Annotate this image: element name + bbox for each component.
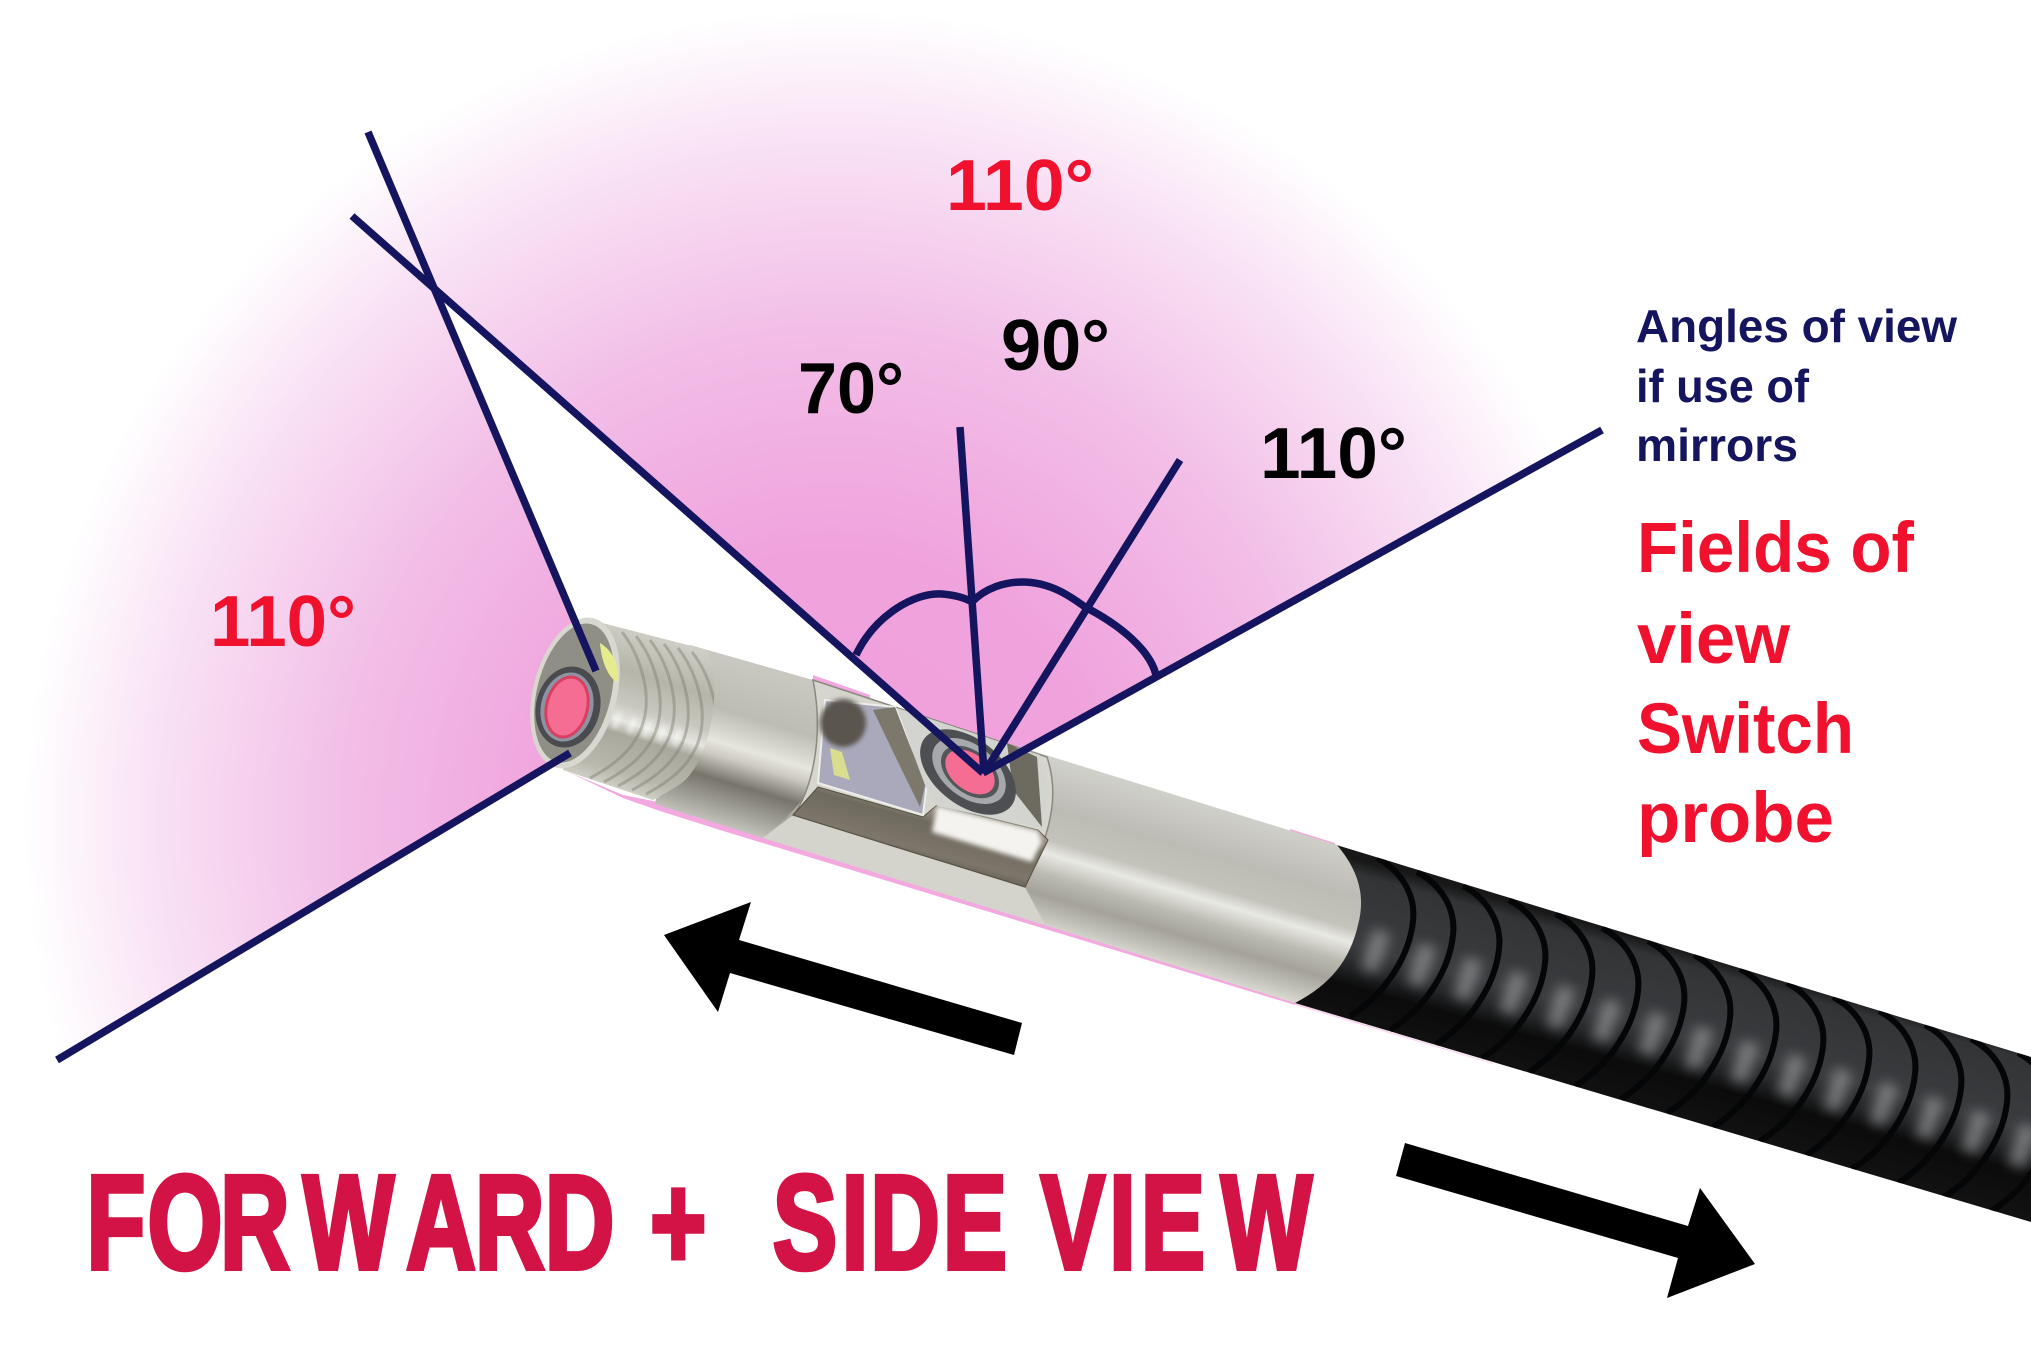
front lens face [516,608,634,778]
LED bay [818,699,927,815]
forward view upper limit [368,132,596,671]
note: angles of view: mirrors [1636,419,1798,471]
note: fields of view switch probe [1637,509,1914,858]
70 degree line [960,427,984,773]
note: angles of view: Angles of view [1636,300,1957,352]
pink field-of-view glow [60,46,1522,1034]
pink halo along the probe [566,675,1493,1064]
title: FORWARD + SIDE VIEW [86,1147,1313,1297]
note: fields of view switch probe: Switch [1637,690,1854,769]
flexible black cable [1295,843,2031,1225]
side view left limit [352,216,983,773]
dark band under the side window [793,787,1048,887]
threaded tip [563,618,716,800]
forward view lower limit [57,753,570,1060]
label: 90 degrees: 90° [1001,306,1110,386]
camera bay [897,708,1050,828]
arc: right [972,582,1156,675]
label: 110 degrees left: 110° [210,582,356,662]
bright patch on the band [932,806,1042,862]
left metal segment [655,645,821,838]
arc: left [856,594,972,655]
raised section around the side window [793,680,1053,887]
label: 110 degrees top: 110° [946,146,1094,226]
light lower body under the band [763,815,1045,925]
angle lines [57,132,1602,1060]
side view right limit [983,430,1602,773]
probe [516,608,2031,1225]
note: fields of view switch probe: Fields of [1637,509,1914,588]
side camera lens [904,712,1032,832]
arrow: backward [1396,1143,1755,1298]
arrow: forward [664,902,1022,1055]
note: angles of view [1636,300,1957,471]
note: fields of view switch probe: view [1637,600,1791,679]
90 degree line [984,460,1180,773]
note: angles of view: if use of [1636,360,1810,412]
metal body [655,645,1361,1003]
label: 110 degrees right: 110° [1260,414,1407,494]
label: 70 degrees: 70° [798,349,904,429]
note: fields of view switch probe: probe [1637,779,1834,858]
